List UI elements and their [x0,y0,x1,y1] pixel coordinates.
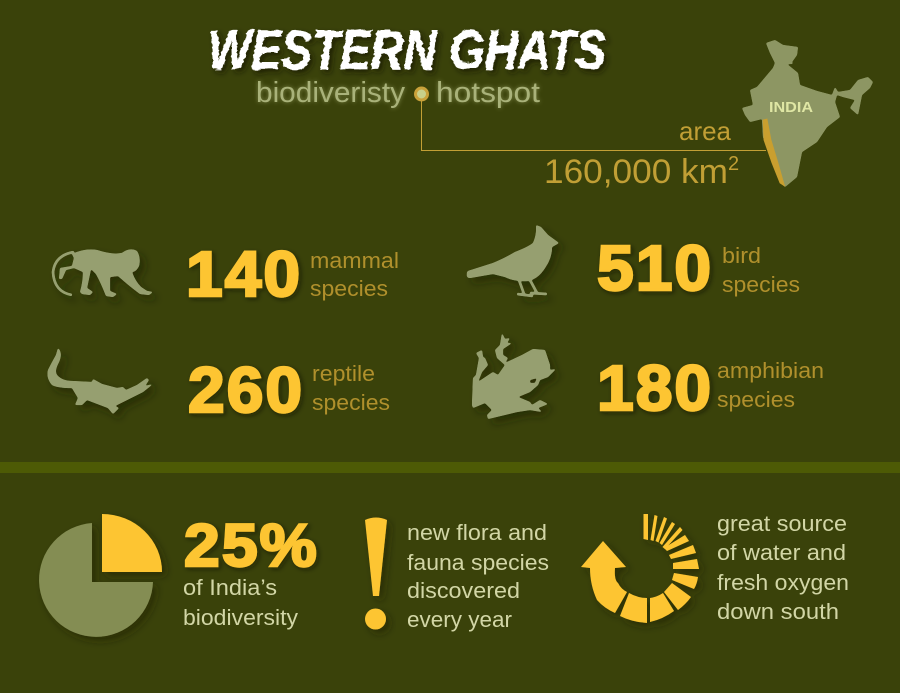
icon: bird [467,225,559,296]
water and oxygen text [717,511,849,624]
icon: frog [472,333,556,419]
stat: mammals: 140 [186,238,302,310]
area value: 160,000 km [544,153,728,191]
area value: 2 [728,153,739,175]
stat: mammals: mammal [310,248,399,273]
icon: circular arrow [581,514,699,623]
stat: reptiles: 260 [188,354,304,426]
stat: birds [597,232,800,304]
connector line from hotspot dot to map [422,98,766,150]
stat: amphibians: amphibian [717,358,824,383]
stat: reptiles [188,354,390,426]
hotspot dot [416,88,428,100]
new species text: discovered [407,578,520,603]
title: WESTERN GHATS [208,18,606,81]
stat: amphibians: species [717,387,795,412]
subtitle: hotspot [436,77,540,109]
stat: biodiversity share [183,513,319,630]
subtitle: biodiveristy [256,77,406,109]
water and oxygen text: great source [717,511,847,536]
new species text: new flora and [407,520,547,545]
stat: birds: 510 [597,232,713,304]
water and oxygen text: of water and [717,540,846,565]
icon: monkey [53,249,153,297]
subtitle [256,77,540,109]
india label: INDIA [769,99,813,116]
water and oxygen text: fresh oxygen [717,570,849,595]
new species text: fauna species [407,550,549,575]
stat: birds: bird [722,243,761,268]
stat: amphibians: 180 [597,352,713,424]
stat: mammals: species [310,276,388,301]
icon: crocodile [48,348,153,414]
area label: area [679,116,732,146]
stat: biodiversity share: biodiversity [183,605,298,630]
india map [742,40,873,187]
new species text: every year [407,607,512,632]
stat: reptiles: species [312,390,390,415]
stat: birds: species [722,272,800,297]
western ghats strip [763,119,784,186]
stat: biodiversity share: 25% [184,513,319,580]
stat: reptiles: reptile [312,361,375,386]
pie chart [39,514,162,637]
icon: exclamation mark [365,518,387,630]
stat: biodiversity share: of India’s [183,575,277,600]
stat: mammals [186,238,399,310]
water and oxygen text: down south [717,599,839,624]
new species text [407,520,549,632]
divider band [0,462,900,473]
stat: amphibians [597,352,824,424]
